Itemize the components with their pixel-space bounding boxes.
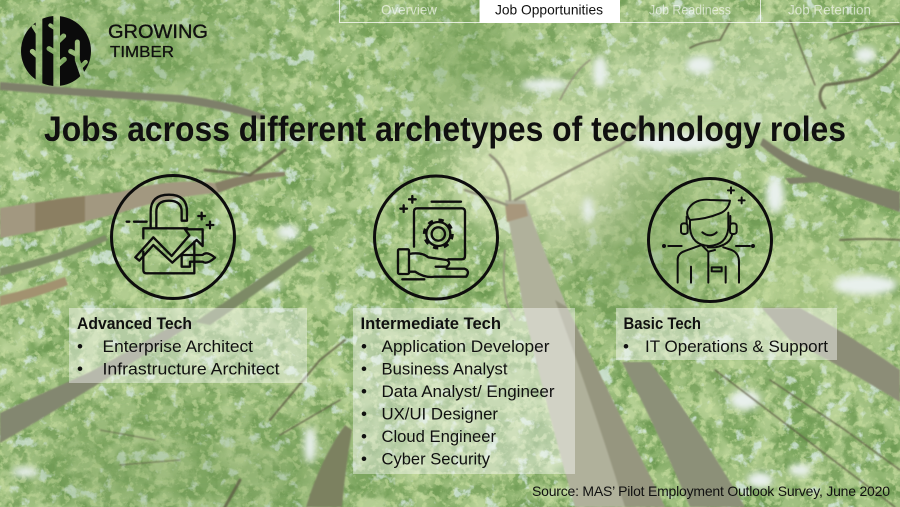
icon: support agent with headset bbox=[648, 178, 772, 302]
logo wordmark: TIMBER bbox=[110, 44, 174, 61]
navigation tabs bbox=[340, 0, 900, 23]
lower middle trunk bbox=[306, 425, 352, 507]
list: advanced roles: Enterprise Architect bbox=[102, 337, 253, 356]
panel: Advanced Tech bbox=[69, 308, 307, 383]
logo mark bbox=[21, 16, 91, 86]
logo: Growing Timber bbox=[21, 16, 207, 86]
active tab bbox=[480, 0, 620, 23]
navigation tabs: Job Opportunities bbox=[495, 2, 603, 18]
heading: Intermediate Tech: Intermediate Tech bbox=[360, 314, 501, 333]
list: basic roles: • bbox=[623, 337, 629, 356]
logo wordmark: GROWING bbox=[108, 22, 208, 43]
logo wordmark bbox=[108, 22, 208, 61]
list: intermediate roles: Cyber Security bbox=[382, 450, 490, 468]
list: intermediate roles: • bbox=[361, 360, 367, 378]
list: intermediate roles: • bbox=[361, 337, 367, 356]
navigation tabs: Job Readiness bbox=[649, 2, 731, 18]
lower-left trunk bbox=[0, 322, 195, 443]
list: intermediate roles: • bbox=[361, 427, 367, 446]
right limb bbox=[760, 138, 900, 212]
list: intermediate roles: Application Developer bbox=[382, 337, 550, 356]
list: intermediate roles: Cloud Engineer bbox=[382, 427, 496, 446]
heading: Basic Tech: Basic Tech bbox=[624, 314, 701, 333]
list: intermediate roles: • bbox=[361, 382, 367, 401]
right trunk bbox=[762, 308, 900, 402]
icon: hand holding gear bbox=[374, 176, 498, 299]
list: intermediate roles: UX/UI Designer bbox=[382, 404, 498, 424]
navigation tabs: Overview bbox=[381, 2, 438, 18]
list: advanced roles: • bbox=[77, 337, 83, 356]
list: intermediate roles: Data Analyst/ Engineer bbox=[382, 382, 555, 401]
panel: Intermediate Tech bbox=[353, 308, 575, 474]
source note: Source: MAS’ Pilot Employment Outlook Survey, June 2020 bbox=[532, 483, 890, 499]
icon: padlock with growth arrow and key bbox=[112, 176, 234, 298]
list: intermediate roles: • bbox=[361, 450, 367, 468]
branches from central trunk bbox=[465, 60, 640, 320]
upper left limb bbox=[0, 82, 265, 120]
left minor limbs bbox=[0, 277, 68, 306]
title: Jobs across different archetypes of technology roles bbox=[44, 110, 846, 149]
second trunk bbox=[622, 362, 745, 507]
list: advanced roles: • bbox=[77, 360, 83, 378]
list: intermediate roles: Business Analyst bbox=[382, 360, 508, 378]
left thick limb bbox=[0, 182, 218, 238]
list: advanced roles: Infrastructure Architect bbox=[102, 360, 280, 378]
list: intermediate roles: • bbox=[361, 404, 367, 424]
central trunk bbox=[505, 200, 665, 507]
heading: Advanced Tech: Advanced Tech bbox=[77, 314, 192, 333]
panel: Basic Tech bbox=[616, 308, 837, 360]
navigation tabs: Job Retention bbox=[788, 2, 871, 18]
list: advanced roles bbox=[77, 337, 280, 378]
list: intermediate roles bbox=[361, 337, 555, 468]
list: basic roles: IT Operations & Support bbox=[645, 337, 828, 356]
